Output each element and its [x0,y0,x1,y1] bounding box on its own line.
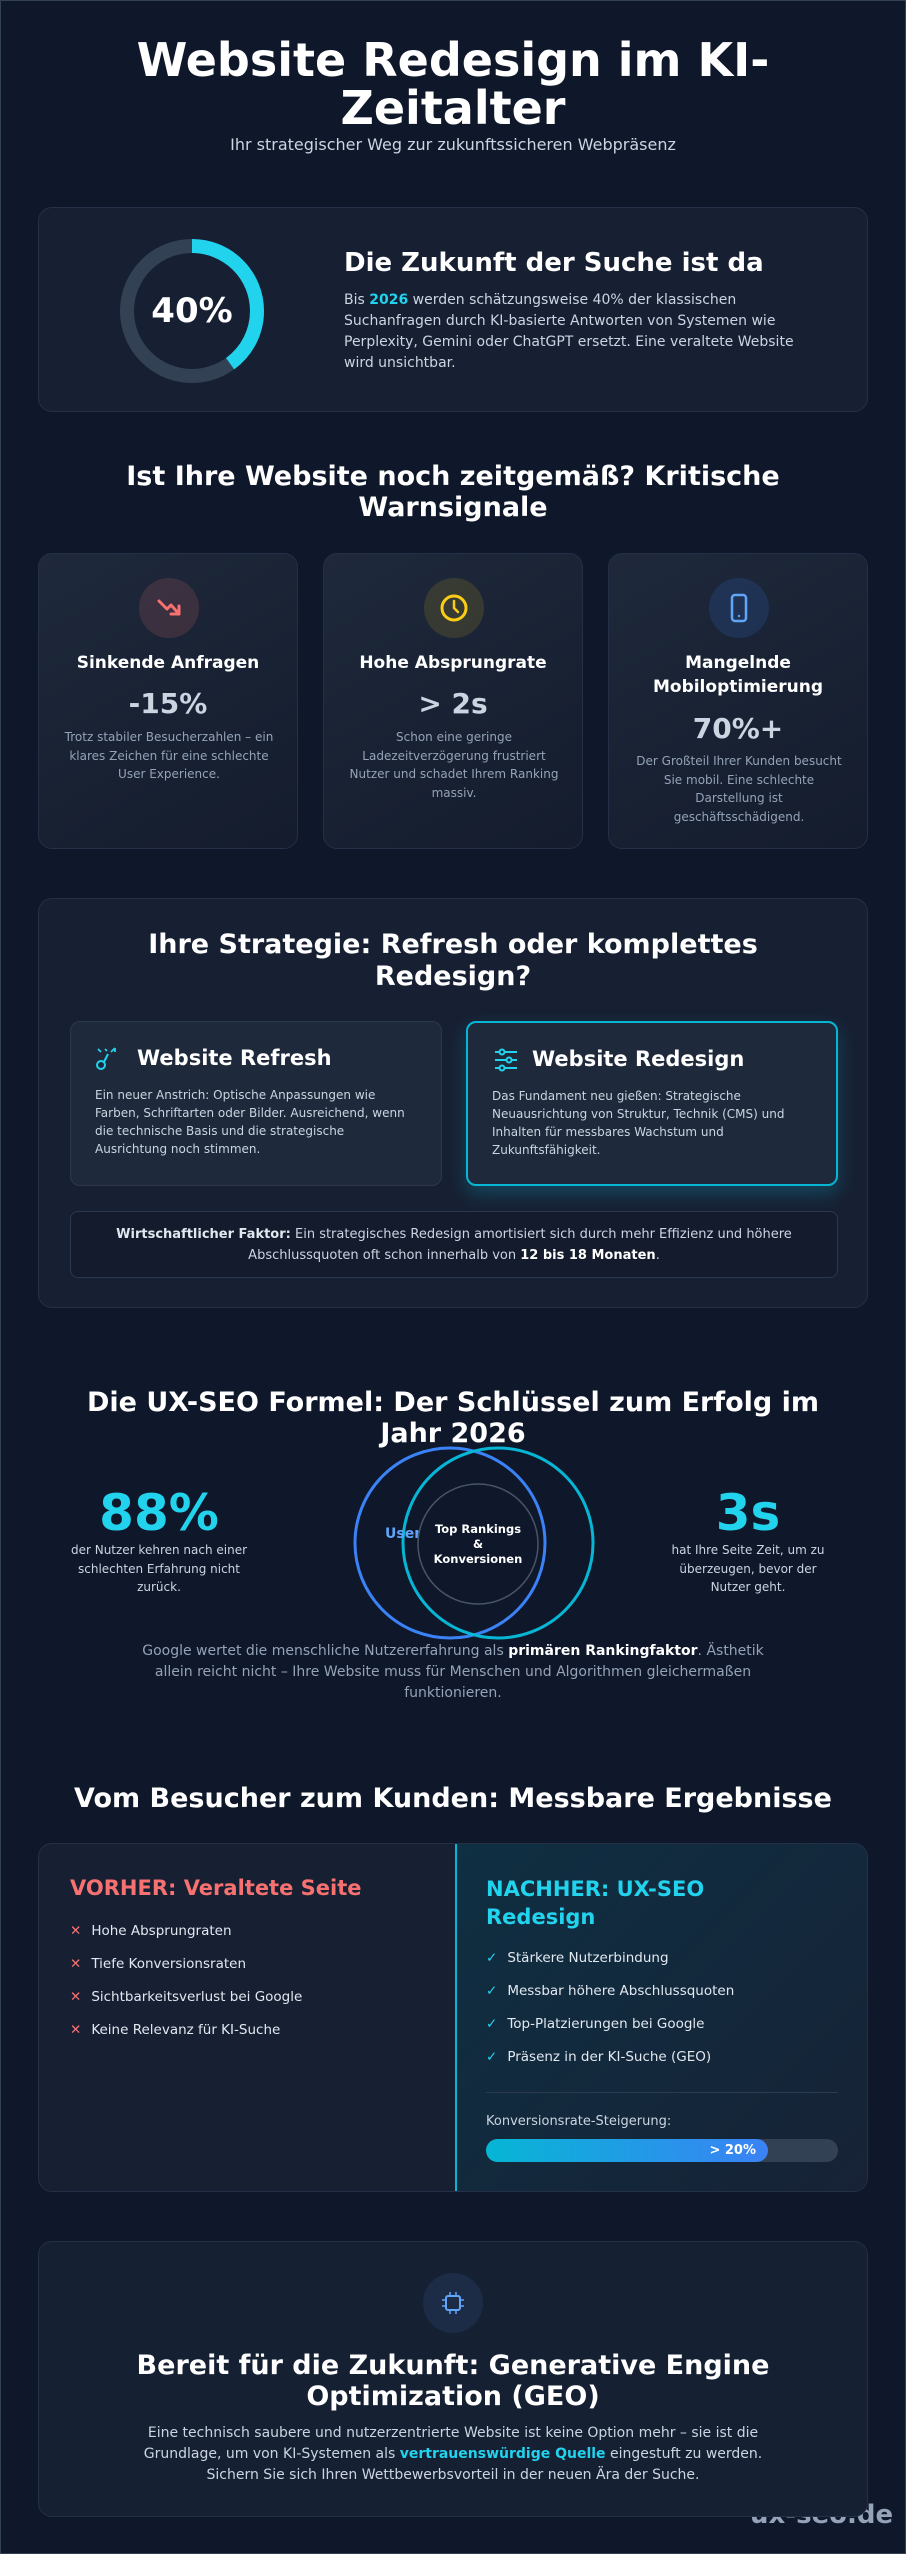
card: redesign: Das Fundament neu gießen: Strategische Neuausrichtung von Struktur, Technik (CMS) und Inhalten für messbares Wachstum und Zukunftsfähigkeit. [492,1089,784,1157]
panel: future of search [38,207,868,412]
column: before: ✕ Sichtbarkeitsverlust bei Google [70,1989,302,2005]
donut chart 40%: 40% [151,291,233,331]
column: after: Konversionsrate-Steigerung: [486,2114,671,2129]
card: redesign: Website Redesign [532,1047,744,1071]
card: refresh: Website Refresh [137,1046,332,1070]
card: mobiloptimierung: 70%+ [693,712,783,745]
heading [148,929,758,992]
title: Zeitalter [340,81,566,135]
icon: phone [709,578,769,638]
icon: sliders [495,1048,517,1072]
column: after: ✓ Präsenz in der KI-Suche (GEO) [486,2049,711,2065]
panel: strategy [38,898,868,1308]
callout: economic factor: Abschlussquoten oft schon innerhalb von 12 bis 18 Monaten. [248,1248,660,1263]
icon: trending down [139,578,199,638]
card: sinkende anfragen [38,553,298,849]
paragraph: ranking factor: funktionieren. [404,1685,502,1701]
stat: 88%: der Nutzer kehren nach einer schlechten Erfahrung nicht zurück. [71,1543,247,1594]
card: absprungrate: Hohe Absprungrate [359,653,547,673]
body text: Sichern Sie sich Ihren Wettbewerbsvorteil in der neuen Ära der Suche. [207,2467,699,2483]
card: absprungrate: Schon eine geringe Ladezeitverzögerung frustriert Nutzer und schadet Ihrem Ranking massiv. [350,730,558,800]
card: refresh: Ein neuer Anstrich: Optische Anpassungen wie Farben, Schriftarten oder Bilder. Ausreichend, wenn die technische Basis und die strategische Ausrichtung noch stimmen. [95,1088,405,1156]
heading: Die Zukunft der Suche ist da [344,248,764,278]
column: after: Redesign [486,1905,595,1929]
column: before: VORHER: Veraltete Seite [70,1876,362,1900]
heading: Redesign? [375,961,531,992]
progress bar: > 20% [709,2143,756,2158]
column: after: ✓ Messbar höhere Abschlussquoten [486,1983,734,1999]
paragraph: ranking factor: allein reicht nicht – Ihre Website muss für Menschen und Algorithmen gleichermaßen [155,1664,751,1680]
stat: 3s [671,1484,824,1594]
column: before [70,1876,362,2038]
heading: warning signals: Warnsignale [358,492,548,523]
venn diagram: & [473,1537,483,1551]
title: Website Redesign im KI- [137,33,769,87]
icon: chip [423,2273,483,2333]
heading: UX-SEO formula: Jahr 2026 [380,1418,526,1449]
card: mobiloptimierung [608,553,868,849]
subtitle: Ihr strategischer Weg zur zukunftssicheren Webpräsenz [230,135,676,154]
stat: 88%: 88% [99,1484,219,1542]
callout: economic factor: Wirtschaftlicher Faktor: Ein strategisches Redesign amortisiert sich durch mehr Effizienz und höhere [116,1227,792,1242]
card: mobiloptimierung: Der Großteil Ihrer Kunden besucht Sie mobil. Eine schlechte Darstellung ist geschäftsschädigend. [636,754,842,824]
body text: Grundlage, um von KI-Systemen als vertrauenswürdige Quelle eingestuft zu werden. [144,2446,762,2462]
venn diagram [354,1446,594,1640]
card: absprungrate [323,553,583,849]
card: mobiloptimierung: Mobiloptimierung [653,677,823,697]
body text [144,2425,762,2483]
card: mobiloptimierung: Mangelnde [685,653,791,673]
card: sinkende anfragen: -15% [129,687,207,720]
heading: warning signals: Ist Ihre Website noch zeitgemäß? Kritische [126,461,780,492]
card: sinkende anfragen: Trotz stabiler Besucherzahlen – ein klares Zeichen für eine schlechte User Experience. [65,730,273,781]
panel: before/after [38,1843,868,2192]
card: refresh [70,1021,442,1186]
panel: GEO [38,2241,868,2517]
progress bar [486,2139,838,2162]
icon: brush [96,1047,116,1070]
venn diagram: Top Rankings [435,1522,521,1536]
heading: warning signals [126,461,780,523]
card: absprungrate: > 2s [418,687,488,720]
column: after [455,1844,869,2193]
stat: 88% [71,1484,248,1594]
heading: results: Vom Besucher zum Kunden: Messbare Ergebnisse [74,1783,832,1814]
card: redesign [466,1021,838,1186]
heading: UX-SEO formula: Die UX-SEO Formel: Der Schlüssel zum Erfolg im [87,1387,819,1418]
stat: 3s: 3s [716,1484,780,1542]
heading: UX-SEO formula [87,1387,819,1449]
body text: Eine technisch saubere und nutzerzentrierte Website ist keine Option mehr – sie ist die [148,2425,758,2441]
column: before: ✕ Hohe Absprungraten [70,1923,232,1939]
paragraph: ranking factor: Google wertet die menschliche Nutzererfahrung als primären Rankingfaktor. Ästhetik [142,1643,764,1659]
heading: Ihre Strategie: Refresh oder komplettes [148,929,758,960]
column: before: ✕ Keine Relevanz für KI-Suche [70,2022,280,2038]
venn diagram: Konversionen [434,1552,522,1566]
heading [137,2350,769,2412]
title [137,33,769,135]
heading: Bereit für die Zukunft: Generative Engine [137,2350,769,2381]
heading: Optimization (GEO) [306,2381,600,2412]
paragraph: ranking factor [142,1642,764,1701]
body text: Bis 2026 werden schätzungsweise 40% der klassischen Suchanfragen durch KI-basierte Antworten von Systemen wie Perplexity, Gemini oder ChatGPT ersetzt. Eine veraltete Website wird unsichtbar. [344,292,794,371]
column: after: ✓ Stärkere Nutzerbindung [486,1950,669,1966]
card: sinkende anfragen: Sinkende Anfragen [77,653,259,673]
icon: clock [424,578,484,638]
stat: 3s: hat Ihre Seite Zeit, um zu überzeugen, bevor der Nutzer geht. [671,1543,824,1594]
venn diagram: User [385,1526,421,1542]
column: after: NACHHER: UX-SEO [486,1877,704,1901]
callout: economic factor [70,1211,838,1278]
column: before: ✕ Tiefe Konversionsraten [70,1956,246,1972]
column: after: ✓ Top-Platzierungen bei Google [486,2016,704,2032]
watermark: ux-seo.de [750,2500,893,2530]
donut chart 40% [120,239,264,383]
